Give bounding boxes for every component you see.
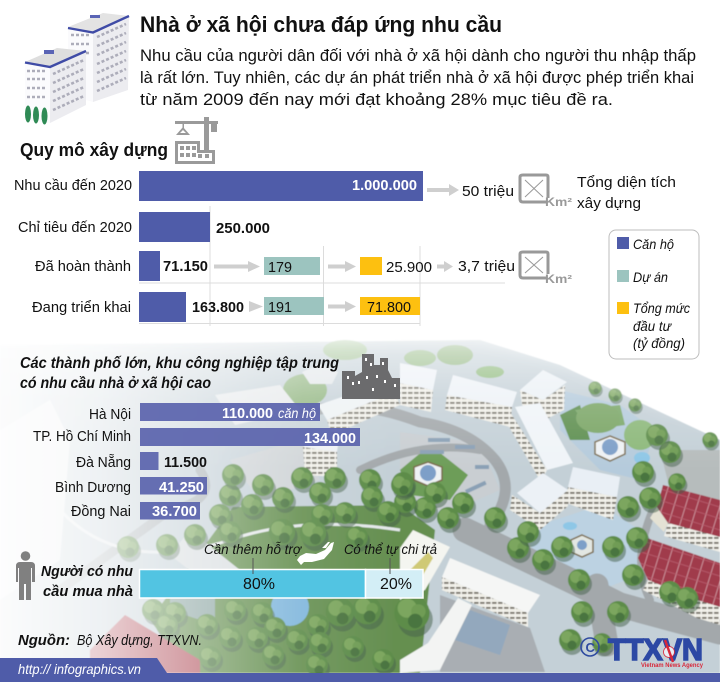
- row: under construction: 71.800: [367, 299, 411, 316]
- roads: [60, 406, 720, 645]
- stacked bar: 80 and 20 percent: [140, 558, 423, 598]
- bar chart: cities: [33, 403, 360, 520]
- legend: Dự án: [633, 269, 668, 285]
- row: completed: 3,7 triệu: [458, 258, 515, 275]
- row: Ho Chi Minh City: 134.000: [304, 430, 356, 447]
- row: Dong Nai: Đồng Nai: [71, 503, 131, 520]
- row: demand to 2020: 1.000.000: [352, 177, 417, 194]
- icon: person: [16, 551, 35, 600]
- footer bar: [0, 658, 720, 682]
- title: Nhà ở xã hội chưa đáp ứng nhu cầu: [140, 12, 502, 37]
- legend: Căn hộ: [633, 236, 674, 252]
- heading: big cities: có nhu cầu nhà ở xã hội cao: [20, 375, 211, 392]
- icon: area km2 demand: Km²: [545, 197, 572, 209]
- legend: Tổng mức: [633, 300, 690, 316]
- row: Binh Duong: 41.250: [159, 479, 204, 496]
- label: can self-pay: Có thể tự chi trả: [344, 542, 437, 557]
- row: completed: 25.900: [386, 259, 432, 276]
- row: under construction: Đang triển khai: [32, 299, 131, 316]
- icon: city skyline: [342, 354, 400, 399]
- row: Dong Nai: [71, 502, 200, 520]
- row: completed: 179: [268, 259, 292, 276]
- row: Da Nang: Đà Nẵng: [76, 454, 131, 471]
- icon: crane and building: [175, 117, 218, 164]
- row: Da Nang: 11.500: [164, 454, 207, 471]
- row: Dong Nai: 36.700: [152, 503, 197, 520]
- intro text: Nhu cầu của người dân đối với nhà ở xã hội dành cho người thu nhập thấp: [140, 46, 696, 65]
- row: Binh Duong: [55, 477, 207, 496]
- logo: TTXVN: TTXVN: [608, 632, 703, 667]
- row: completed: Đã hoàn thành: [35, 258, 131, 275]
- legend: (tỷ đồng): [633, 335, 685, 351]
- icon: supporting hands: [297, 542, 334, 565]
- logo: TTXVN: C: [586, 640, 596, 655]
- row: demand to 2020: Nhu cầu đến 2020: [14, 177, 132, 194]
- stacked bar: 80 and 20 percent: 80%: [243, 576, 275, 593]
- row: Ha Noi: căn hộ: [278, 405, 316, 421]
- row: target to 2020: Chỉ tiêu đến 2020: [18, 219, 132, 236]
- label: people needing housing: cầu mua nhà: [43, 583, 133, 600]
- row: Binh Duong: Bình Dương: [55, 479, 131, 496]
- label: people needing housing: Người có nhu: [41, 563, 133, 580]
- arrow: demand to area: [427, 184, 459, 196]
- top fade of aerial view: [0, 310, 720, 430]
- text: total construction area: Tổng diện tích: [577, 174, 676, 191]
- cars in parking: [420, 438, 489, 494]
- legend: [609, 230, 699, 359]
- grid lines: [139, 206, 505, 326]
- source: [18, 633, 202, 649]
- intro text: từ năm 2009 đến nay mới đạt khoảng 28% mục tiêu đề ra.: [140, 90, 613, 109]
- legend: đầu tư: [633, 318, 672, 334]
- background: aerial view of housing estate: [0, 340, 720, 680]
- source: Nguồn:: [18, 633, 70, 649]
- pavilions: [414, 462, 442, 486]
- intro text: [140, 46, 696, 109]
- row: under construction: [32, 292, 420, 322]
- trees: [117, 381, 719, 680]
- row: Ha Noi: [89, 403, 320, 423]
- heading: construction scale: Quy mô xây dựng: [20, 140, 168, 160]
- bar chart: housing scale: [14, 171, 515, 322]
- row: completed: [35, 251, 515, 281]
- heading: big cities: [20, 355, 339, 392]
- text: total construction area: [577, 174, 676, 212]
- row: Ho Chi Minh City: TP. Hồ Chí Minh: [33, 428, 131, 445]
- row: target to 2020: [18, 212, 270, 242]
- row: under construction: 163.800: [192, 299, 244, 316]
- row: demand to 2020: [14, 171, 423, 201]
- icon: area km2 completed: [520, 252, 572, 286]
- icon: apartment towers: [25, 13, 129, 124]
- row: Ho Chi Minh City: [33, 428, 360, 447]
- row: target to 2020: 250.000: [216, 220, 270, 237]
- intro text: là rất lớn. Tuy nhiên, các dự án phát triển nhà ở xã hội được phép triển khai: [140, 68, 694, 87]
- stacked bar: 80 and 20 percent: 20%: [380, 576, 412, 593]
- footer bar: http:// infographics.vn: [18, 661, 141, 677]
- text: 50 million: 50 triệu: [462, 183, 514, 200]
- text: total construction area: xây dựng: [577, 195, 641, 212]
- heading: big cities: Các thành phố lớn, khu công nghiệp tập trung: [20, 355, 339, 372]
- row: Da Nang: [76, 452, 207, 471]
- label: people needing housing: [41, 563, 133, 600]
- icon: area km2 completed: Km²: [545, 274, 572, 286]
- logo: TTXVN: Vietnam News Agency: [641, 662, 703, 669]
- icon: area km2 demand: [520, 175, 572, 209]
- row: Ha Noi: 110.000: [222, 405, 273, 422]
- label: needs support: Cần thêm hỗ trợ: [204, 542, 303, 557]
- buildings: [400, 383, 433, 412]
- row: under construction: 191: [268, 299, 292, 316]
- row: Ha Noi: Hà Nội: [89, 406, 131, 423]
- row: completed: 71.150: [163, 258, 208, 275]
- source: Bộ Xây dựng, TTXVN.: [77, 633, 202, 649]
